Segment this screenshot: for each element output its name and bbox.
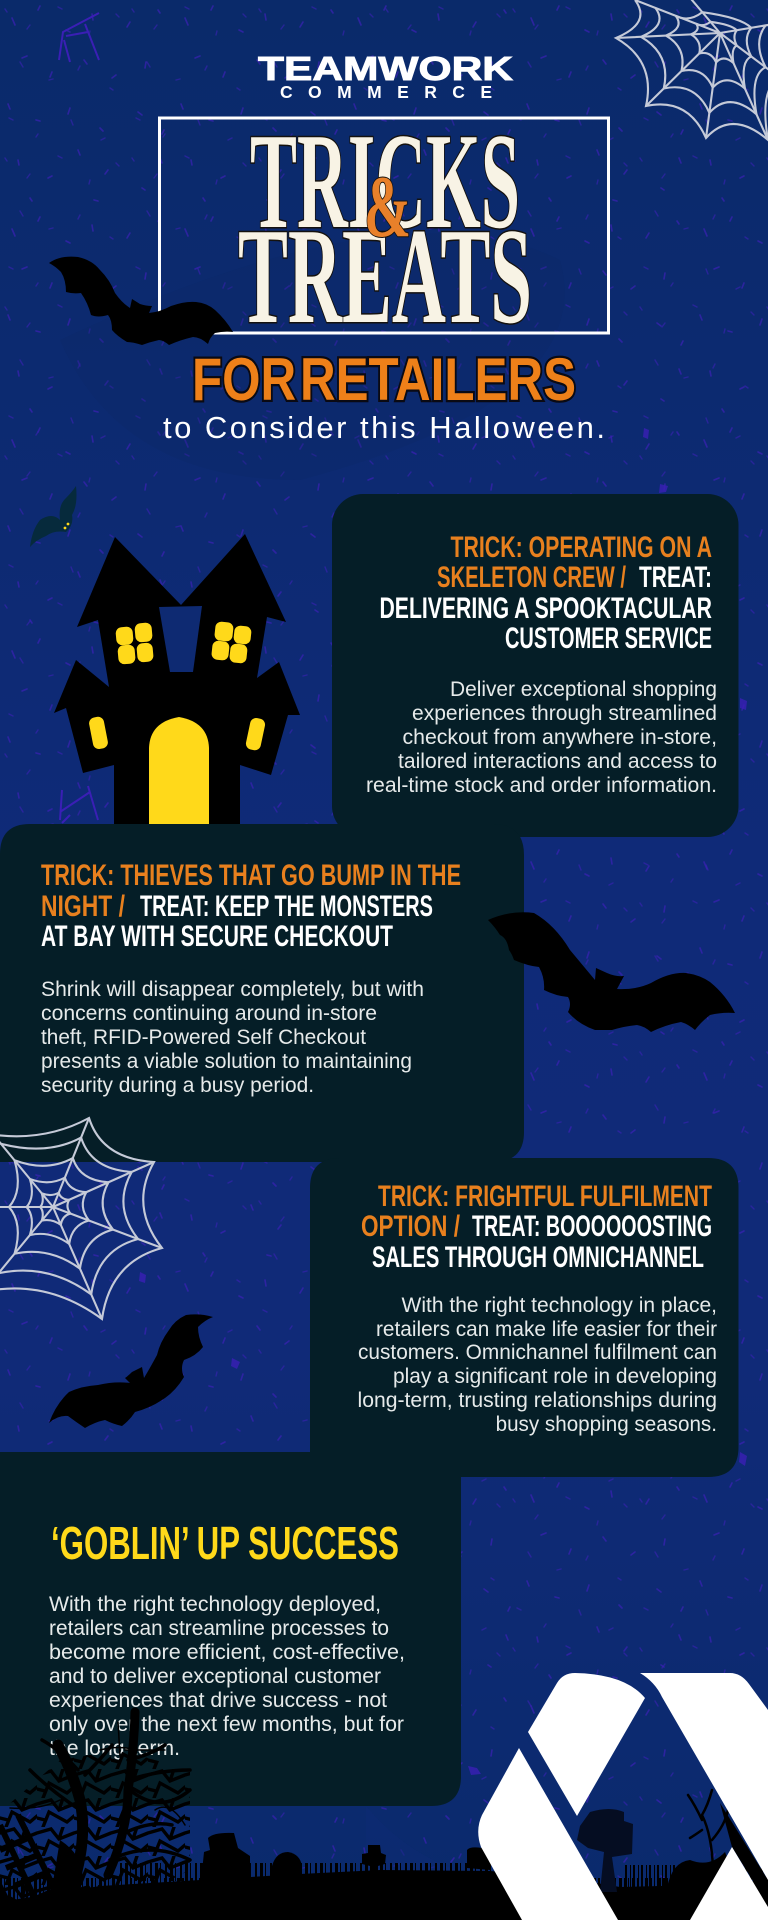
panel: goblin up success bbox=[0, 1452, 461, 1806]
heading: trick 2: TREAT: KEEP THE MONSTERS bbox=[140, 890, 433, 923]
icon: web left bbox=[0, 1118, 162, 1319]
text block: trick 1 body bbox=[366, 678, 717, 797]
heading: trick 1 bbox=[380, 531, 712, 655]
ground and grass bbox=[0, 1870, 768, 1920]
text block: goblin body: become more efficient, cost-effective, bbox=[49, 1641, 405, 1664]
heading: trick 2 bbox=[41, 859, 461, 953]
text block: goblin body: experiences that drive success - not bbox=[49, 1689, 387, 1712]
icon: bat over title box bbox=[49, 257, 233, 345]
logo: Teamwork Commerce: COMMERCE bbox=[280, 82, 492, 102]
heading: goblin up success: ‘GOBLIN’ UP SUCCESS bbox=[51, 1517, 399, 1569]
text block: trick 2 body: Shrink will disappear completely, but with bbox=[41, 978, 424, 1001]
panel: trick 2 thieves bbox=[0, 824, 524, 1162]
text block: trick 2 body: security during a busy period. bbox=[41, 1074, 314, 1097]
icon: small bat with yellow eyes bbox=[30, 486, 76, 547]
heading: trick 2: AT BAY WITH SECURE CHECKOUT bbox=[41, 920, 393, 953]
text block: goblin body: only over the next few months, but for bbox=[49, 1713, 404, 1736]
text block: trick 3 body: With the right technology in place, bbox=[402, 1294, 717, 1317]
text block: trick 3 body: long-term, trusting relationships during bbox=[358, 1389, 717, 1412]
heading: trick 2: NIGHT / bbox=[41, 890, 125, 923]
title: Tricks & Treats: & bbox=[364, 159, 411, 256]
heading: trick 1: TREAT: bbox=[639, 561, 712, 594]
title: Tricks & Treats: TRICKS bbox=[250, 105, 520, 257]
text block: trick 2 body bbox=[41, 978, 424, 1097]
logo mark: large white monogram bbox=[478, 1673, 768, 1920]
title box outline bbox=[160, 118, 608, 333]
logo: Teamwork Commerce: TEAMWORK bbox=[258, 50, 513, 87]
text block: trick 1 body: checkout from anywhere in-store, bbox=[402, 726, 717, 749]
text block: goblin body: With the right technology deployed, bbox=[49, 1593, 381, 1616]
text block: trick 1 body: real-time stock and order information. bbox=[366, 774, 717, 797]
heading: trick 3 bbox=[361, 1180, 712, 1274]
tree canopy mesh bbox=[0, 1750, 190, 1910]
text block: trick 2 body: concerns continuing around in-store bbox=[41, 1002, 377, 1025]
panel: trick 1 skeleton crew bbox=[332, 494, 738, 837]
text block: trick 3 body: play a significant role in developing bbox=[393, 1365, 717, 1388]
logo: Teamwork Commerce bbox=[258, 50, 513, 102]
heading: trick 2: TRICK: THIEVES THAT GO BUMP IN THE bbox=[41, 859, 461, 892]
subtitle: to Consider this Halloween: to Consider this Halloween. bbox=[163, 410, 605, 445]
heading: trick 3: OPTION / bbox=[361, 1210, 460, 1243]
text block: trick 3 body: retailers can make life easier for their bbox=[376, 1318, 717, 1341]
tree right bbox=[688, 1790, 728, 1870]
icon: haunted house bbox=[54, 534, 300, 824]
icon: bat right of panel 2 bbox=[488, 912, 735, 1032]
text block: trick 1 body: experiences through streamlined bbox=[412, 702, 717, 725]
text block: trick 3 body: busy shopping seasons. bbox=[496, 1413, 717, 1436]
subtitle: For Retailers: FOR RETAILERS bbox=[192, 346, 576, 413]
graveyard silhouette bbox=[0, 1712, 768, 1920]
tree left bbox=[10, 1712, 190, 1888]
icon: bat lower left bbox=[49, 1314, 213, 1428]
text block: trick 1 body: Deliver exceptional shopping bbox=[450, 678, 717, 701]
text block: goblin body bbox=[49, 1593, 405, 1760]
text block: trick 1 body: tailored interactions and access to bbox=[398, 750, 717, 773]
fence left bbox=[0, 1815, 70, 1920]
text block: goblin body: the long-term. bbox=[49, 1737, 180, 1760]
text block: trick 3 body: customers. Omnichannel fulfilment can bbox=[358, 1341, 717, 1364]
icon: web top right bbox=[616, 0, 768, 140]
title: Tricks & Treats bbox=[238, 105, 532, 352]
text block: goblin body: retailers can streamline processes to bbox=[49, 1617, 389, 1640]
text block: trick 3 body bbox=[358, 1294, 717, 1436]
heading: trick 1: SKELETON CREW / bbox=[437, 561, 626, 594]
gravestones bbox=[200, 1833, 250, 1892]
text block: trick 2 body: theft, RFID-Powered Self Checkout bbox=[41, 1026, 366, 1049]
text block: trick 2 body: presents a viable solution to maintaining bbox=[41, 1050, 412, 1073]
title: Tricks & Treats: TREATS bbox=[238, 200, 532, 352]
text block: goblin body: and to deliver exceptional customer bbox=[49, 1665, 381, 1688]
panel: trick 3 fulfilment bbox=[310, 1158, 738, 1477]
